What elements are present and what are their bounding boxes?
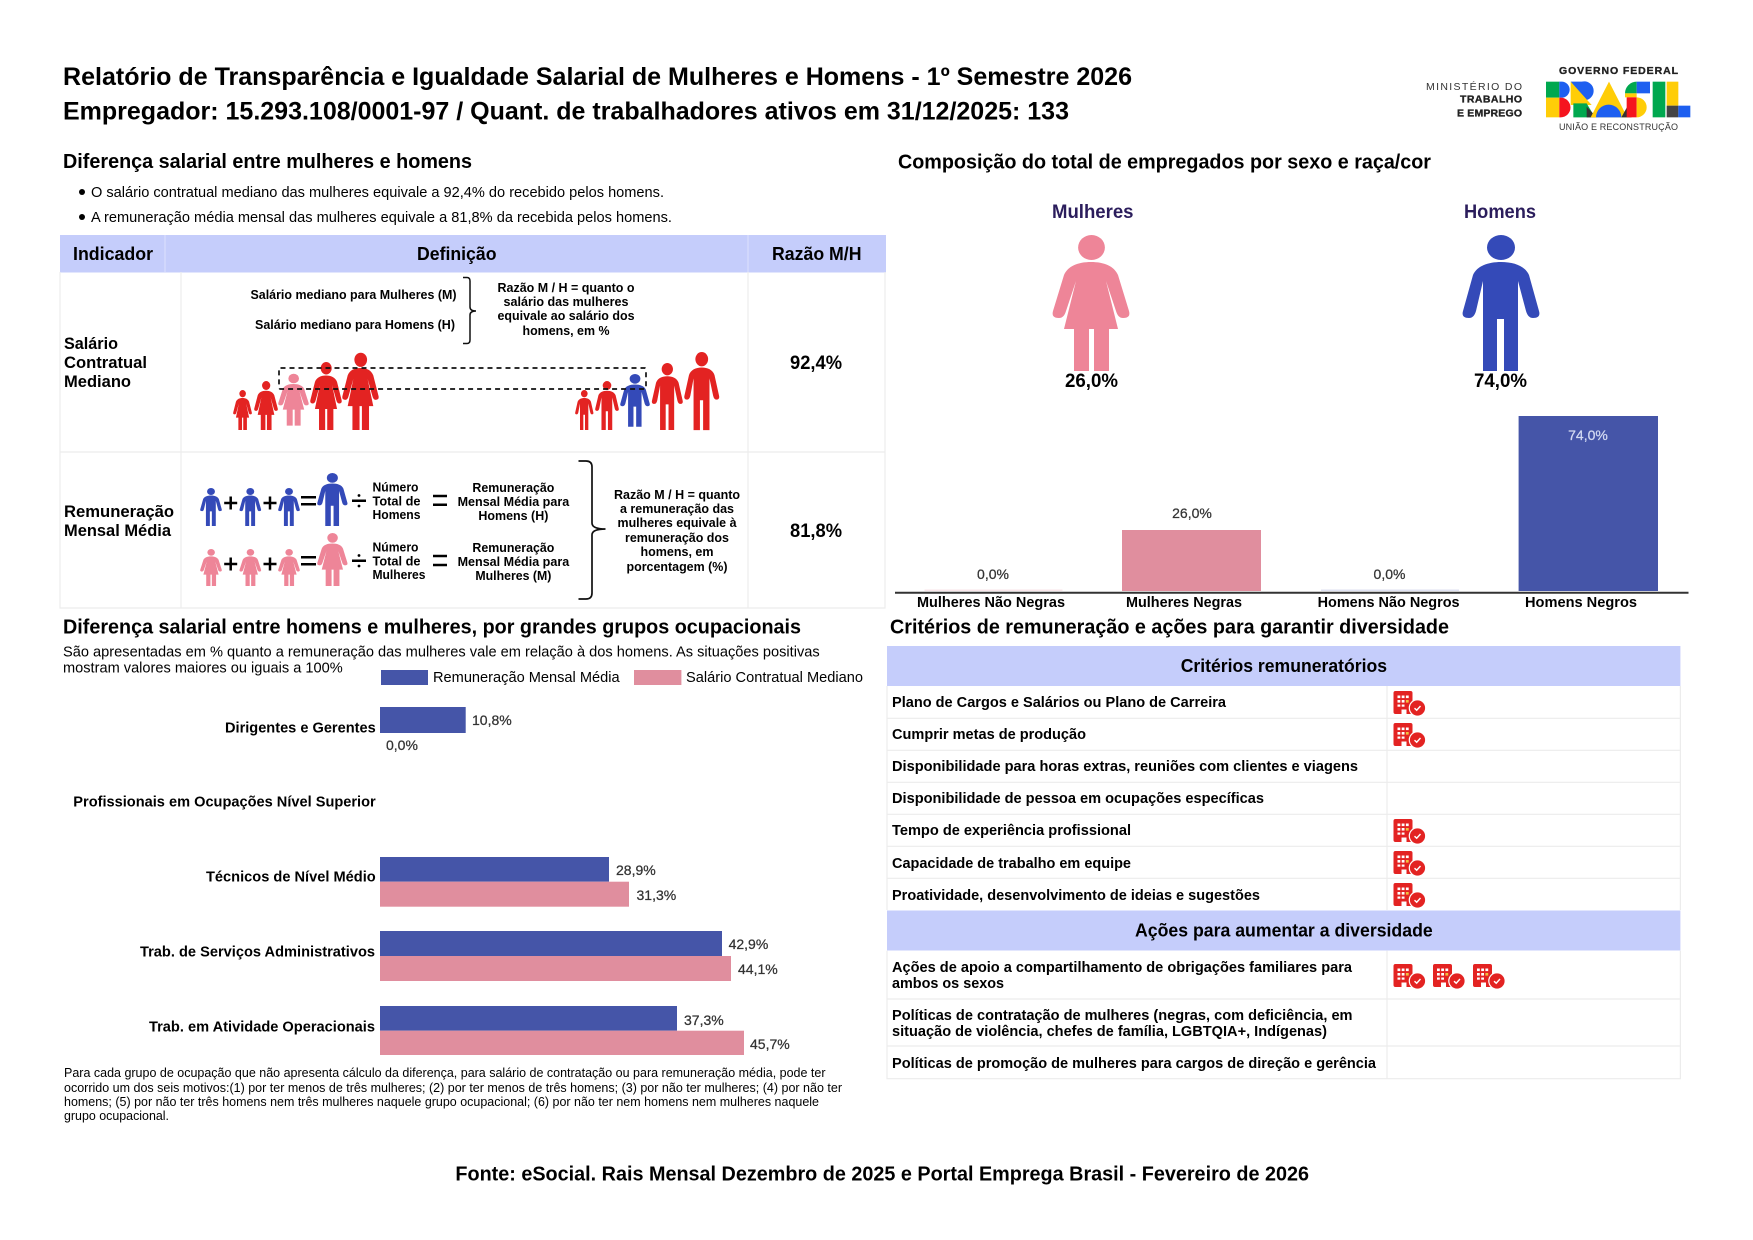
- table: ações para aumentar a diversidade: situação de violência, chefes de família, LGBTQIA+, Indígenas): [892, 1024, 1327, 1040]
- logo: Ministério do Trabalho e Emprego, Governo Federal: UNIÃO E RECONSTRUÇÃO: [1559, 122, 1678, 132]
- table header: Razão M/H: [772, 244, 862, 264]
- row: salário contratual mediano: Mediano: [64, 372, 131, 391]
- table: ações para aumentar a diversidade: ambos os sexos: [892, 976, 1004, 992]
- panel: critérios de remuneração e ações: [887, 616, 1680, 1079]
- definition text: salário das mulheres: [504, 295, 629, 309]
- table: indicadores: [60, 235, 886, 608]
- pictogram: mulheres: Mulheres: [1052, 202, 1134, 223]
- row: remuneração mensal média: Remuneração: [64, 502, 174, 521]
- formula: women: Número: [372, 541, 419, 555]
- icon: company check: [1394, 964, 1426, 990]
- table: ações para aumentar a diversidade: Políticas de promoção de mulheres para cargos de direção e gerência: [892, 1056, 1377, 1072]
- definition text: Razão M / H = quanto o: [498, 281, 635, 295]
- formula: men: Homens: [372, 508, 421, 522]
- heading: Composição do total de empregados por sexo e raça/cor: [898, 152, 1431, 174]
- title: Relatório de Transparência e Igualdade Salarial de Mulheres e Homens - 1º Semestre 2026: [63, 63, 1132, 91]
- panel: composição por sexo e raça/cor: [895, 152, 1688, 611]
- legend: Salário Contratual Mediano: [686, 669, 863, 686]
- table: critérios remuneratórios: Critérios remuneratórios: [1181, 656, 1387, 676]
- definition text: [498, 281, 635, 338]
- bar chart: sexo e raça: 0,0%: [977, 566, 1009, 582]
- table: critérios remuneratórios: Cumprir metas de produção: [892, 727, 1086, 743]
- bar chart: sexo e raça: 0,0%: [1374, 566, 1405, 582]
- icons: men in salary order: [575, 352, 719, 430]
- bar chart: grupos ocupacionais: Trab. de Serviços Administrativos: [140, 945, 375, 961]
- bar chart: grupos ocupacionais: 0,0%: [386, 737, 418, 753]
- formula: men: Remuneração: [472, 481, 555, 495]
- dashed median box: [279, 368, 646, 389]
- row: salário contratual mediano: Salário mediano para Mulheres (M): [250, 288, 456, 302]
- definition text: equivale ao salário dos: [498, 309, 635, 323]
- bar chart: grupos ocupacionais: 44,1%: [738, 961, 778, 977]
- logo: Ministério do Trabalho e Emprego, Governo Federal: [1426, 65, 1690, 132]
- row: salário contratual mediano: Contratual: [64, 353, 147, 372]
- bar chart: grupos ocupacionais: 31,3%: [636, 887, 676, 903]
- heading: Critérios de remuneração e ações para garantir diversidade: [890, 616, 1449, 638]
- icon: company check: [1394, 851, 1426, 877]
- icon: company check: [1394, 691, 1426, 717]
- formula: men: Total de: [372, 495, 421, 509]
- formula: men: Homens (H): [478, 509, 548, 523]
- row: remuneração mensal média: 81,8%: [790, 521, 842, 542]
- definition text: homens, em: [640, 545, 714, 559]
- row: salário contratual mediano: Salário: [64, 334, 118, 353]
- formula: women: Total de: [372, 555, 421, 569]
- table header: Indicador: [73, 244, 153, 264]
- pictogram: homens: Homens: [1464, 202, 1536, 223]
- table: ações para aumentar a diversidade: [887, 910, 1680, 1079]
- bar chart: sexo e raça: Homens Não Negros: [1318, 595, 1460, 611]
- icon: company check: [1394, 819, 1426, 845]
- row: salário contratual mediano: Salário mediano para Homens (H): [255, 318, 455, 332]
- logo: Ministério do Trabalho e Emprego, Governo Federal: MINISTÉRIO DO: [1426, 80, 1522, 93]
- icon: company check: [1394, 723, 1426, 749]
- formula: women: [200, 533, 570, 586]
- bar chart: sexo e raça: [895, 416, 1688, 611]
- table header: Definição: [417, 244, 496, 264]
- row: salário contratual mediano: [64, 278, 842, 430]
- pictogram: homens: [1463, 202, 1539, 392]
- pictogram: mulheres: 26,0%: [1065, 371, 1118, 392]
- legend: [381, 669, 863, 686]
- table: critérios remuneratórios: Proatividade, desenvolvimento de ideias e sugestões: [892, 888, 1260, 904]
- description: São apresentadas em % quanto a remuneração das mulheres vale em relação à dos homens. As situações positivas: [63, 644, 820, 661]
- icon: company check: [1394, 883, 1426, 909]
- panel: diferença salarial entre mulheres e homens: [60, 151, 886, 608]
- bar chart: grupos ocupacionais: 45,7%: [750, 1036, 790, 1052]
- bar chart: grupos ocupacionais: [73, 707, 790, 1055]
- footnote: [64, 1065, 843, 1123]
- table: ações para aumentar a diversidade: Ações para aumentar a diversidade: [1135, 921, 1433, 941]
- formula: women: Remuneração: [472, 541, 555, 555]
- bullet texts: A remuneração média mensal das mulheres equivale a 81,8% da recebida pelos homens.: [91, 209, 672, 226]
- logo: Ministério do Trabalho e Emprego, Governo Federal: E EMPREGO: [1457, 108, 1522, 120]
- table: critérios remuneratórios: Capacidade de trabalho em equipe: [892, 856, 1131, 872]
- bullet texts: [79, 184, 672, 226]
- footnote: homens; (5) por não ter três homens nem três mulheres naquele grupo ocupacional; (6) por não ter nem homens nem mulheres naquele: [64, 1094, 819, 1109]
- formula: men: [200, 473, 570, 526]
- definition text: porcentagem (%): [626, 560, 728, 574]
- footnote: Para cada grupo de ocupação que não apresenta cálculo da diferença, para salário de contratação ou para remuneração média, pode ter: [64, 1065, 826, 1080]
- table: critérios remuneratórios: Plano de Cargos e Salários ou Plano de Carreira: [892, 695, 1227, 711]
- bar chart: grupos ocupacionais: Profissionais em Ocupações Nível Superior: [73, 795, 376, 811]
- row: remuneração mensal média: Mensal Média: [64, 521, 172, 540]
- table: ações para aumentar a diversidade: Políticas de contratação de mulheres (negras, com deficiência, em: [892, 1008, 1352, 1024]
- definition text: mulheres equivale à: [618, 516, 737, 530]
- bar chart: grupos ocupacionais: 42,9%: [729, 936, 768, 952]
- row: remuneração mensal média: [64, 461, 842, 599]
- bar chart: grupos ocupacionais: 28,9%: [616, 862, 656, 878]
- brace: [463, 278, 476, 344]
- icons: women in salary order: [233, 353, 379, 430]
- footnote: ocorrido um dos seis motivos:(1) por ter menos de três mulheres; (2) por ter menos de três homens; (3) por não ter mulheres; (4) por não ter: [64, 1080, 843, 1095]
- row: salário contratual mediano: 92,4%: [790, 353, 842, 374]
- definition text: Razão M / H = quanto: [614, 488, 740, 502]
- bar chart: sexo e raça: 26,0%: [1172, 505, 1212, 521]
- description: mostram valores maiores ou iguais a 100%: [63, 660, 343, 677]
- logo: Ministério do Trabalho e Emprego, Governo Federal: TRABALHO: [1460, 94, 1522, 106]
- formula: women: Mulheres: [372, 568, 426, 582]
- heading: Diferença salarial entre mulheres e homens: [63, 151, 472, 173]
- heading: Diferença salarial entre homens e mulheres, por grandes grupos ocupacionais: [63, 616, 801, 638]
- formula: women: Mulheres (M): [475, 569, 551, 583]
- definition text: remuneração dos: [625, 531, 729, 545]
- pictogram: homens: 74,0%: [1474, 371, 1527, 392]
- title: [63, 63, 1132, 126]
- bar chart: sexo e raça: Homens Negros: [1525, 595, 1637, 611]
- table: critérios remuneratórios: Disponibilidade para horas extras, reuniões com clientes e viagens: [892, 759, 1358, 775]
- table: critérios remuneratórios: [887, 646, 1680, 910]
- formula: women: Mensal Média para: [458, 555, 570, 569]
- source footer: Fonte: eSocial. Rais Mensal Dezembro de 2025 e Portal Emprega Brasil - Fevereiro de 2026: [455, 1164, 1309, 1186]
- panel: diferença por grupos ocupacionais: [63, 616, 863, 1123]
- bar chart: grupos ocupacionais: 37,3%: [684, 1012, 724, 1028]
- definition text: [614, 488, 740, 574]
- table header: [60, 235, 886, 272]
- bar chart: grupos ocupacionais: Dirigentes e Gerentes: [225, 721, 376, 737]
- bar chart: sexo e raça: 74,0%: [1568, 427, 1608, 443]
- pictogram: mulheres: [1052, 202, 1134, 392]
- icon: company check: [1473, 964, 1506, 990]
- table: ações para aumentar a diversidade: Ações de apoio a compartilhamento de obrigações familiares para: [892, 960, 1353, 976]
- bar chart: sexo e raça: Mulheres Não Negras: [917, 595, 1065, 611]
- definition text: homens, em %: [522, 324, 610, 338]
- title: Empregador: 15.293.108/0001-97 / Quant. de trabalhadores ativos em 31/12/2025: 133: [63, 98, 1069, 126]
- bar chart: grupos ocupacionais: Trab. em Atividade Operacionais: [149, 1020, 375, 1036]
- definition text: a remuneração das: [620, 502, 734, 516]
- bar chart: sexo e raça: Mulheres Negras: [1126, 595, 1242, 611]
- description: [63, 644, 820, 677]
- logo: Ministério do Trabalho e Emprego, Governo Federal: GOVERNO FEDERAL: [1559, 65, 1679, 77]
- footnote: grupo ocupacional.: [64, 1108, 169, 1123]
- legend: Remuneração Mensal Média: [433, 669, 620, 686]
- table: critérios remuneratórios: Tempo de experiência profissional: [892, 823, 1131, 839]
- formula: men: Mensal Média para: [458, 495, 570, 509]
- table: critérios remuneratórios: Disponibilidade de pessoa em ocupações específicas: [892, 791, 1264, 807]
- bar chart: grupos ocupacionais: Técnicos de Nível Médio: [206, 870, 376, 886]
- formula: men: Número: [372, 481, 419, 495]
- bar chart: grupos ocupacionais: 10,8%: [472, 712, 512, 728]
- bullet texts: O salário contratual mediano das mulheres equivale a 92,4% do recebido pelos homens.: [91, 184, 664, 201]
- large brace: [578, 461, 606, 599]
- icon: company check: [1433, 964, 1466, 990]
